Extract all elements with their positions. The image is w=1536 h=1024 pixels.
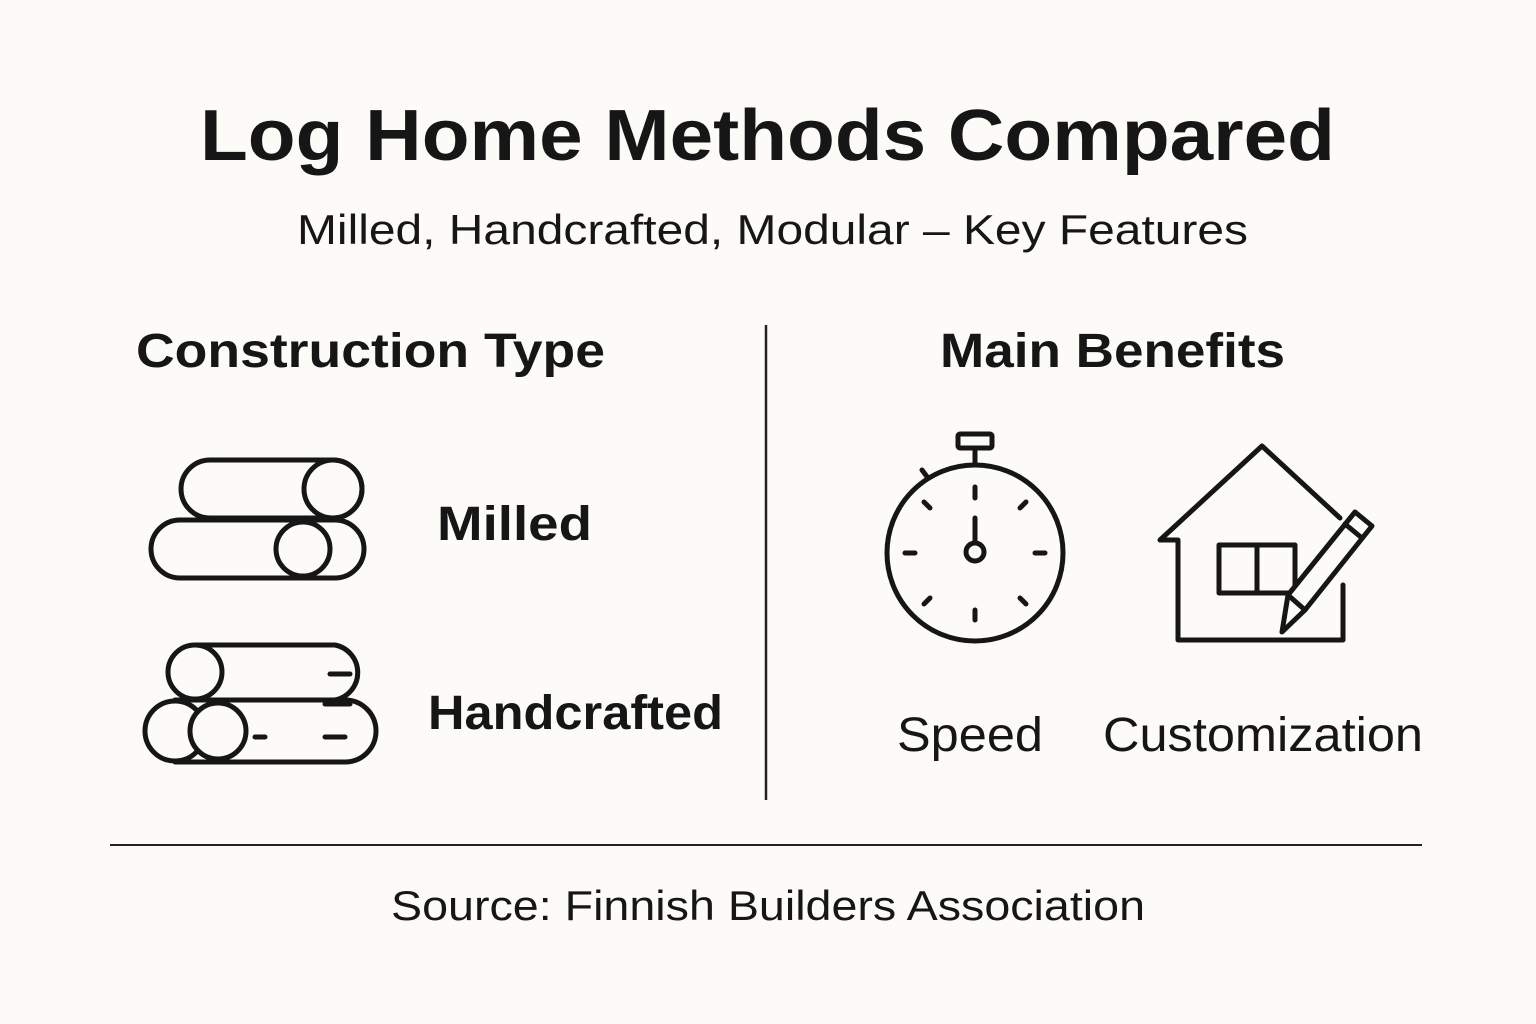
subtitle: Milled, Handcrafted, Modular – Key Features (297, 206, 1248, 253)
label: handcrafted: Handcrafted (428, 687, 723, 740)
source: Source: Finnish Builders Association (391, 882, 1145, 929)
label: speed: Speed (897, 709, 1043, 762)
icon: milled logs (151, 460, 364, 578)
label: customization: Customization (1103, 709, 1423, 762)
icon: house with pencil (1160, 446, 1372, 640)
label: milled: Milled (437, 498, 592, 551)
icon: stopwatch (887, 434, 1063, 641)
title: Log Home Methods Compared (200, 96, 1335, 176)
heading: main benefits: Main Benefits (940, 325, 1285, 378)
icon: handcrafted logs (145, 645, 376, 762)
heading: construction type: Construction Type (136, 325, 605, 378)
